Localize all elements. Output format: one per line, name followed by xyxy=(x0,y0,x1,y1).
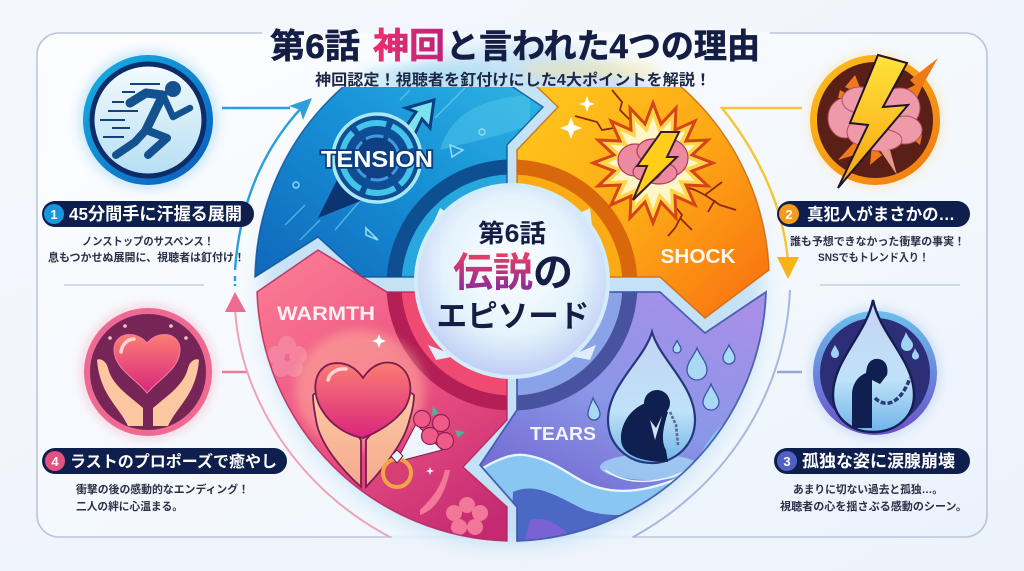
wheel glow xyxy=(262,45,762,545)
label: SHOCK: SHOCK xyxy=(660,246,736,268)
pill heading 3: 孤独な姿に涙腺崩壊 xyxy=(802,452,955,471)
icon: cracks xyxy=(575,90,736,236)
description 2 xyxy=(790,234,965,264)
pill heading 1 xyxy=(42,201,254,227)
description 1: 息もつかせぬ展開に、視聴者は釘付け！ xyxy=(48,250,245,264)
pill heading 1: 45分間手に汗握る展開 xyxy=(69,204,242,224)
connector: yellow arrow xyxy=(722,108,802,279)
center hub xyxy=(416,185,608,377)
description 2: SNSでもトレンド入り！ xyxy=(818,251,929,264)
pill heading 4 xyxy=(42,448,287,474)
icon: heart in hands xyxy=(80,304,216,440)
label: TEARS: TEARS xyxy=(530,424,596,444)
icon: runner xyxy=(78,50,218,190)
label: TENSION: TENSION xyxy=(321,146,433,172)
icon: flower bottom right xyxy=(420,470,488,535)
icon: bouquet xyxy=(396,406,465,462)
panel: TEARS segment xyxy=(478,290,767,542)
pill heading 3 xyxy=(774,448,970,474)
icon: teardrop figure xyxy=(809,300,941,439)
hub heading: 第6話: 第6話 xyxy=(478,220,546,248)
description 1 xyxy=(48,235,245,264)
connector: purple arc xyxy=(633,290,802,537)
description 3: あまりに切ない過去と孤独…。 xyxy=(793,482,943,496)
hub heading: 伝説の: 伝説の xyxy=(453,251,573,295)
pill heading 4: 4 xyxy=(51,454,59,469)
panel: point 2 xyxy=(777,52,970,264)
pill heading 1: 1 xyxy=(50,207,58,222)
pill heading 2 xyxy=(777,201,970,227)
description 3 xyxy=(780,482,967,513)
pill heading 3: 3 xyxy=(783,454,791,469)
icon: heart xyxy=(315,363,410,438)
icon: brain and lightning xyxy=(807,52,943,188)
subtitle: 神回認定！視聴者を釘付けにした4大ポイントを解説！ xyxy=(315,70,711,89)
description 4: 二人の絆に心温まる。 xyxy=(76,499,183,513)
panel: WARMTH segment xyxy=(256,249,508,542)
panel: point 1 xyxy=(42,50,254,264)
title: 神回 xyxy=(373,27,445,66)
icon: ring xyxy=(383,450,411,487)
icon: small drops xyxy=(588,340,735,420)
icon: faint flower xyxy=(267,336,307,377)
description 3: 視聴者の心を揺さぶる感動のシーン。 xyxy=(780,499,967,513)
waves xyxy=(482,424,723,540)
panel: point 4 xyxy=(42,304,287,513)
hub heading: エピソード: エピソード xyxy=(436,299,590,334)
icon: target and arrow xyxy=(318,100,434,218)
pill heading 2: 真犯人がまさかの… xyxy=(807,204,955,224)
icon: teardrop with figure xyxy=(608,332,695,463)
connector: pink arrow xyxy=(222,292,390,537)
panel: TENSION segment xyxy=(254,87,544,278)
icon: burst with brain and bolt xyxy=(593,103,713,223)
icon: hands xyxy=(313,393,414,487)
title: と言われた4つの理由 xyxy=(446,28,760,66)
panel: SHOCK segment xyxy=(516,87,770,319)
label: WARMTH: WARMTH xyxy=(277,304,375,325)
pill heading 2: 2 xyxy=(785,207,793,222)
description 4: 衝撃の後の感動的なエンディング！ xyxy=(76,482,249,496)
description 2: 誰も予想できなかった衝撃の事実！ xyxy=(790,234,965,248)
description 1: ノンストップのサスペンス！ xyxy=(82,235,214,248)
description 4 xyxy=(76,482,249,513)
title xyxy=(270,27,760,66)
connector: blue arrow xyxy=(222,98,312,286)
panel: point 3 xyxy=(774,300,970,513)
pill heading 4: ラストのプロポーズで癒やし xyxy=(70,452,277,471)
title: 第6話 xyxy=(270,28,360,66)
